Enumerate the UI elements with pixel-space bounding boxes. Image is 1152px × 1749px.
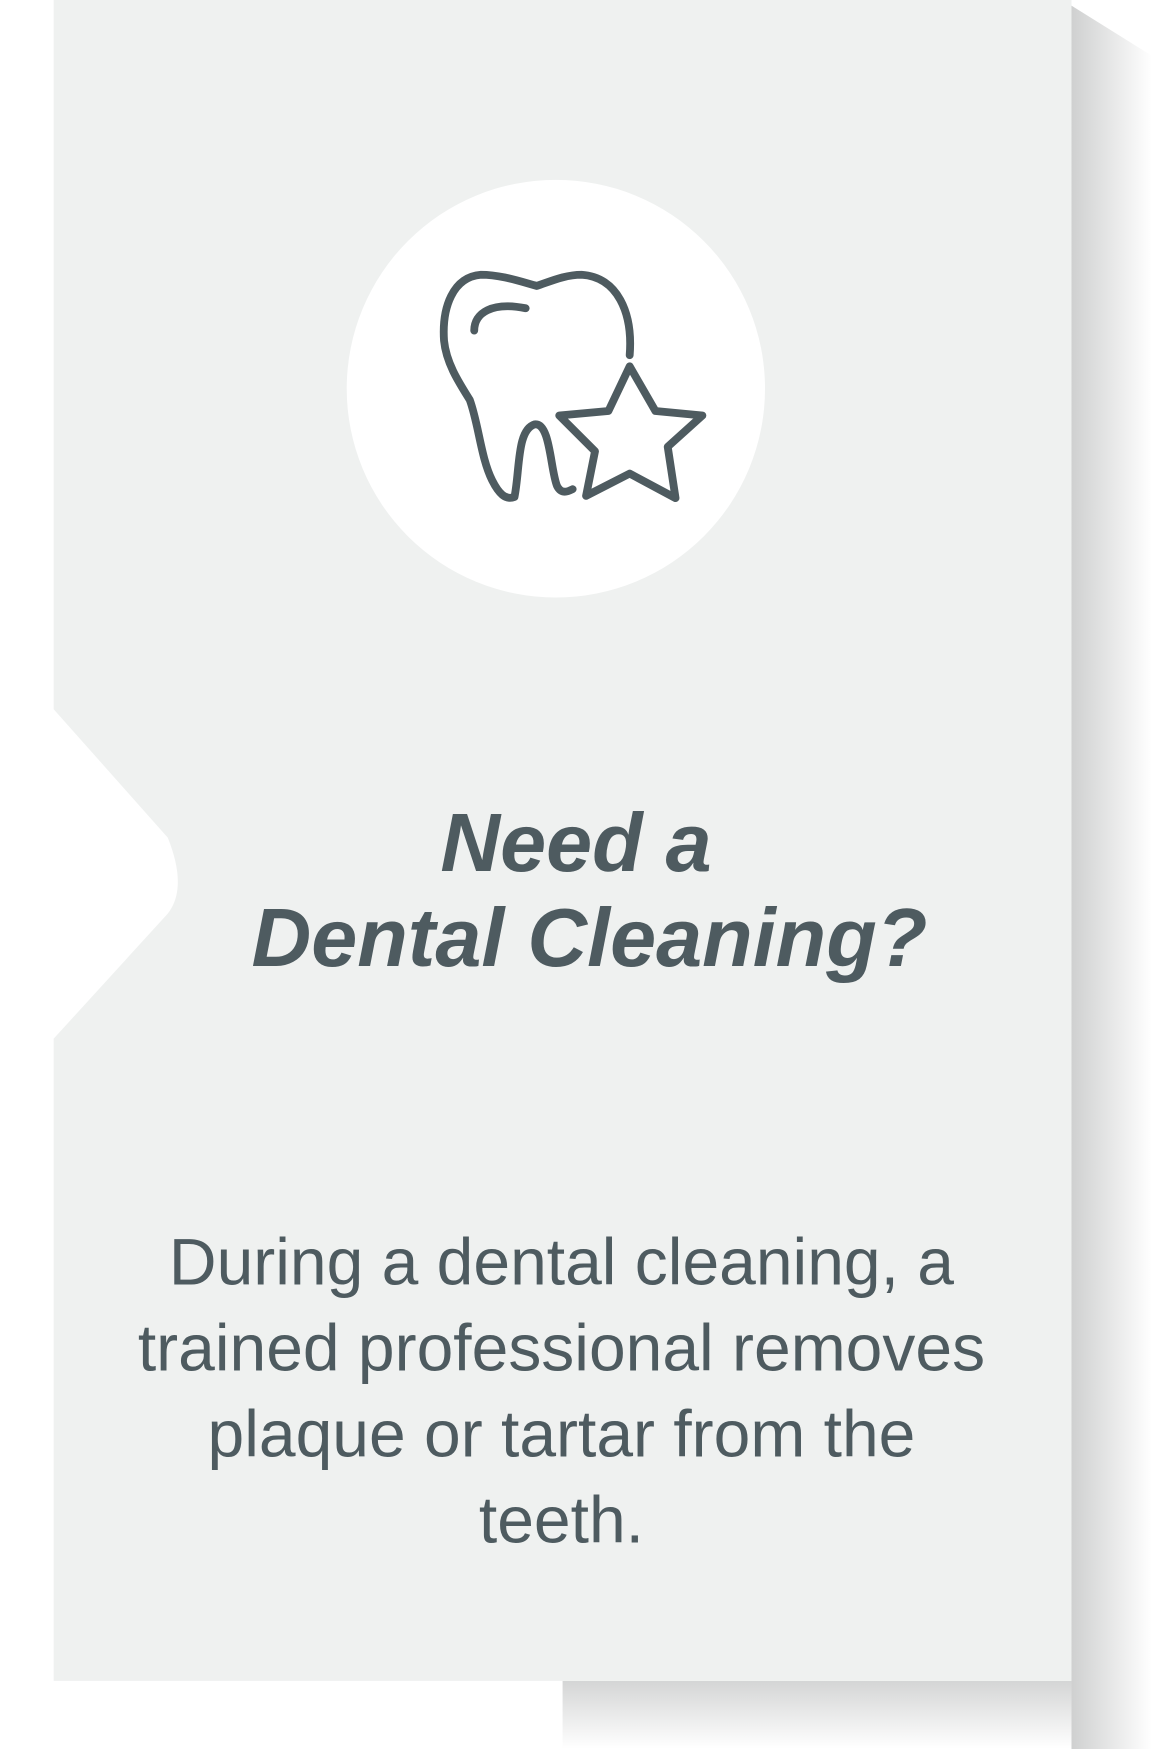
shadow	[563, 6, 1152, 1749]
body text: teeth.	[479, 1482, 644, 1556]
text: Dental Cleaning?	[252, 891, 927, 984]
icon circle	[347, 180, 765, 598]
body text	[138, 1224, 985, 1556]
body text: plaque or tartar from the	[208, 1396, 915, 1470]
title: Need a	[440, 796, 712, 889]
body text: During a dental cleaning, a	[169, 1224, 954, 1298]
body text: trained professional removes	[138, 1310, 985, 1384]
icon: tooth with star	[444, 275, 702, 498]
